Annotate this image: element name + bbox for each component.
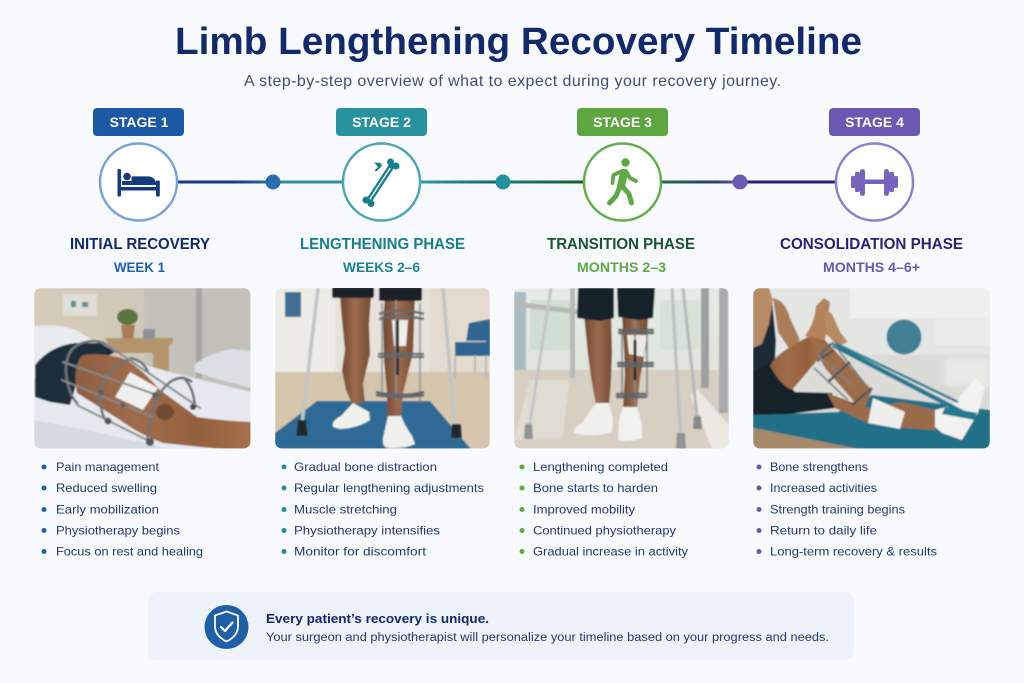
subtitle: A step-by-step overview of what to expect during your recovery journey.	[244, 73, 781, 90]
icon: dumbbell	[836, 144, 913, 220]
badge: stage 3: STAGE 3	[593, 114, 652, 130]
icon: walking person	[584, 144, 661, 220]
key points: stage 4	[756, 460, 937, 558]
key points: stage 2: Regular lengthening adjustments	[294, 481, 484, 495]
badge: stage 4: STAGE 4	[845, 114, 904, 130]
key points: stage 4: Return to daily life	[770, 524, 877, 538]
panel: stage 4	[753, 108, 990, 558]
key points: stage 3	[520, 460, 688, 558]
panel: stage 1	[34, 108, 251, 558]
key points: stage 1: Focus on rest and healing	[56, 544, 203, 558]
key points: stage 2: Gradual bone distraction	[294, 460, 437, 474]
photo: resistance band exercise on mat	[753, 288, 990, 449]
key points: stage 4: Strength training begins	[770, 502, 905, 516]
key points: stage 4: Long-term recovery & results	[770, 544, 937, 558]
key points: stage 2: Monitor for discomfort	[294, 544, 427, 558]
key points: stage 4: Increased activities	[770, 481, 877, 495]
timeframe: weeks 2-6: WEEKS 2–6	[343, 260, 420, 275]
badge: stage 1: STAGE 1	[110, 114, 169, 130]
timeframe: week 1: WEEK 1	[114, 260, 165, 275]
key points: stage 1: Reduced swelling	[56, 481, 157, 495]
key points: stage 1	[42, 460, 203, 558]
badge: stage 2	[336, 108, 427, 136]
badge: stage 3	[577, 108, 668, 136]
heading: initial recovery: INITIAL RECOVERY	[70, 236, 211, 253]
heading: consolidation phase: CONSOLIDATION PHASE	[780, 236, 963, 253]
heading: lengthening phase: LENGTHENING PHASE	[300, 236, 465, 253]
callout: personalized recovery note	[148, 592, 854, 660]
key points: stage 1: Pain management	[56, 460, 160, 474]
icon: bone with arrow	[343, 144, 420, 220]
panel: stage 2	[275, 108, 490, 558]
badge: stage 4	[829, 108, 920, 136]
icon: bed	[100, 144, 177, 220]
key points: stage 3: Continued physiotherapy	[533, 524, 676, 538]
key points: stage 4: Bone strengthens	[770, 460, 868, 474]
photo: standing with crutches on mat	[275, 287, 490, 449]
timeline dot 2	[496, 174, 510, 190]
timeline connector	[177, 174, 836, 190]
heading: transition phase: TRANSITION PHASE	[547, 236, 695, 253]
photo: leg in frame on bed	[34, 288, 251, 449]
timeline dot 1	[266, 174, 280, 190]
key points: stage 2: Physiotherapy intensifies	[294, 524, 440, 538]
title: Limb Lengthening Recovery Timeline	[175, 21, 862, 63]
key points: stage 3: Lengthening completed	[533, 460, 668, 474]
timeframe: months 2-3: MONTHS 2–3	[577, 260, 667, 275]
key points: stage 3: Improved mobility	[533, 502, 635, 516]
callout body: Your surgeon and physiotherapist will personalize your timeline based on your progress and needs.	[266, 632, 829, 644]
badge: stage 2: STAGE 2	[352, 114, 411, 130]
key points: stage 2	[282, 460, 484, 558]
key points: stage 3: Bone starts to harden	[533, 481, 658, 495]
key points: stage 2: Muscle stretching	[294, 502, 397, 516]
badge: stage 1	[93, 108, 184, 136]
photo: walking with frame in corridor	[514, 288, 729, 449]
timeframe: months 4-6+: MONTHS 4–6+	[823, 260, 920, 275]
timeline dot 3	[732, 174, 748, 190]
key points: stage 1: Physiotherapy begins	[56, 524, 180, 538]
icon: shield with check	[204, 605, 248, 649]
panel: stage 3	[514, 108, 729, 558]
key points: stage 1: Early mobilization	[56, 502, 159, 516]
callout heading: Every patient’s recovery is unique.	[266, 611, 489, 626]
key points: stage 3: Gradual increase in activity	[533, 544, 688, 558]
